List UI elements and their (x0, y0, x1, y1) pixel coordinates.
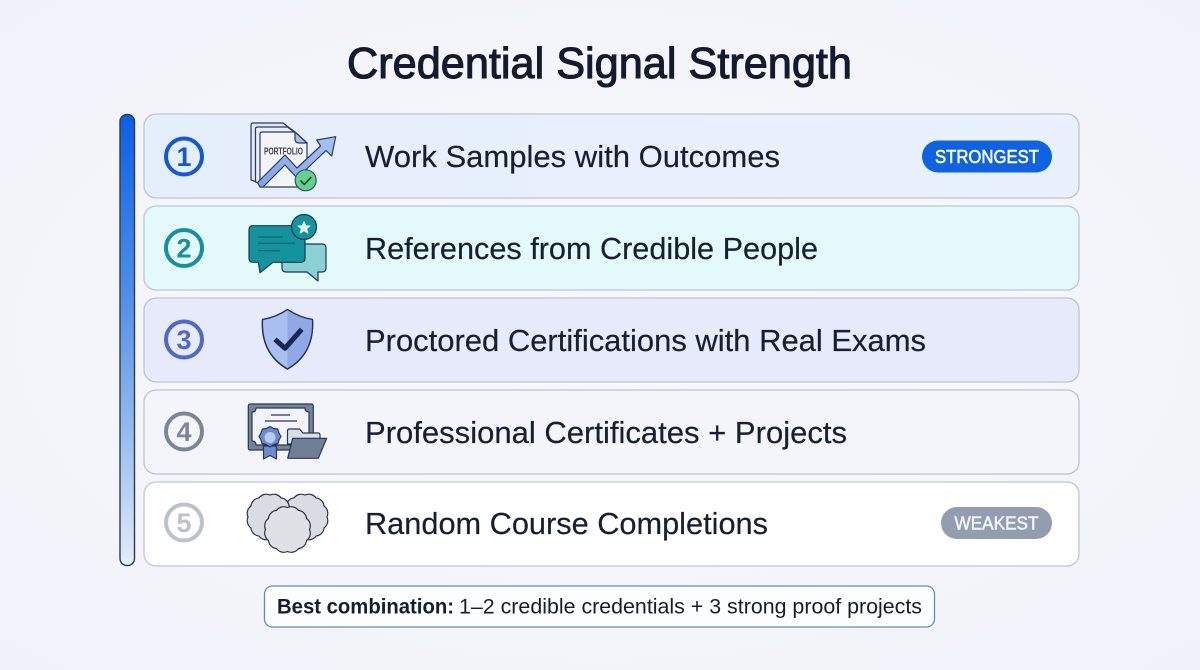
badge: weakest: WEAKEST (954, 514, 1039, 534)
panel: rank 5 random courses (144, 482, 1079, 566)
rank number 5 (166, 504, 202, 540)
rank number 4 (166, 414, 202, 450)
badge: strongest: STRONGEST (935, 147, 1039, 167)
icon: portfolio with rising arrow (251, 123, 336, 191)
panel: rank 1 work samples (144, 114, 1079, 198)
rank number 2: 2 (176, 234, 192, 264)
rank number 3: 3 (176, 325, 192, 355)
icon: speech bubbles with star (249, 214, 326, 281)
title: Credential Signal Strength (347, 39, 852, 88)
badge: weakest (941, 507, 1052, 539)
row label: References from Credible People (365, 231, 818, 266)
row label: Random Course Completions (365, 506, 768, 541)
portfolio label: PORTFOLIO (264, 146, 303, 158)
rank number 1 (166, 138, 202, 174)
callout: best combination: 1–2 credible credentials + 3 strong proof projects (459, 596, 922, 618)
icon: overlapping vague shapes (247, 494, 328, 552)
callout: best combination: Best combination: (277, 596, 454, 618)
rank number 2 (166, 230, 202, 266)
rank number 4: 4 (176, 417, 192, 447)
rank number 5: 5 (176, 508, 192, 538)
icon: certificate with folder (248, 404, 327, 459)
rank number 1: 1 (176, 142, 192, 172)
panel: rank 2 references (144, 206, 1079, 290)
icon: shield with check (262, 310, 313, 369)
strength gradient bar (120, 114, 134, 566)
row label: Work Samples with Outcomes (365, 139, 780, 174)
panel: rank 3 proctored certifications (144, 298, 1079, 382)
badge: strongest (922, 140, 1052, 172)
rank number 3 (166, 322, 202, 358)
row label: Proctored Certifications with Real Exams (365, 323, 926, 358)
row label: Professional Certificates + Projects (365, 415, 847, 450)
panel: rank 4 professional certificates (144, 390, 1079, 474)
callout: best combination (264, 586, 934, 627)
